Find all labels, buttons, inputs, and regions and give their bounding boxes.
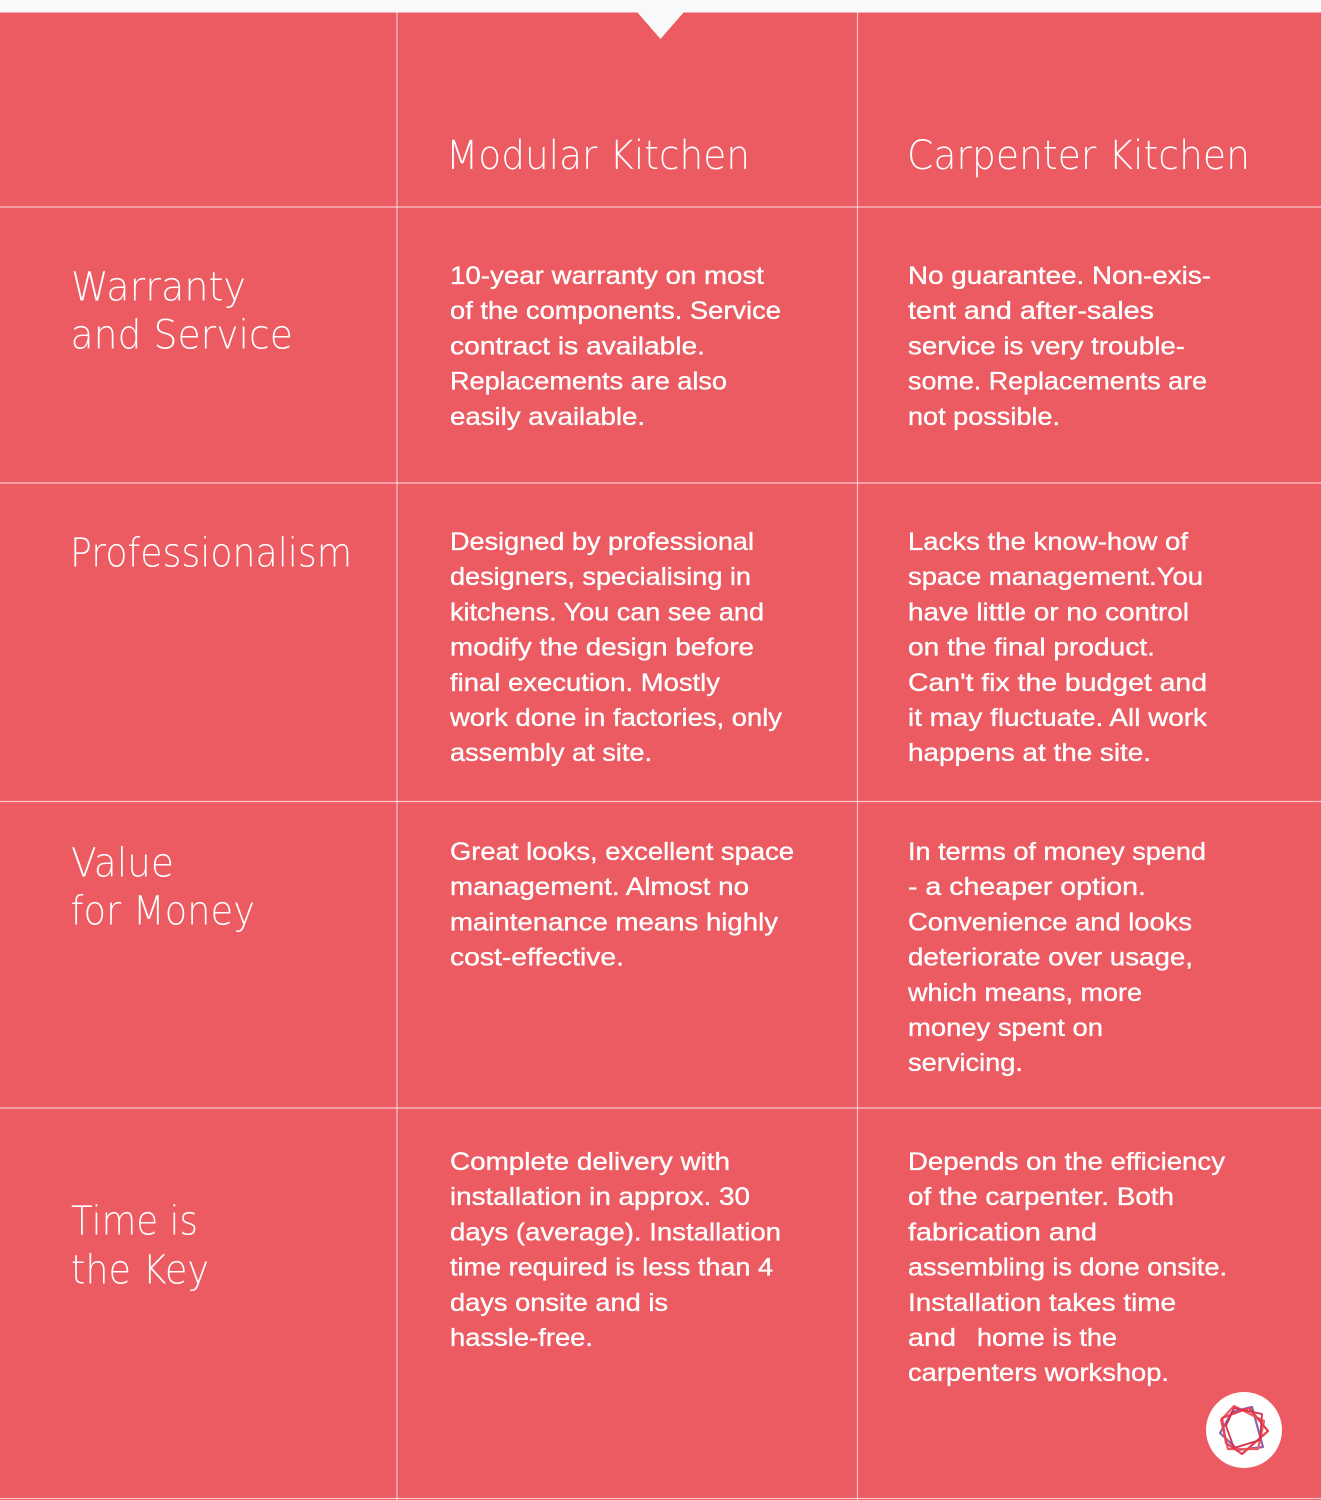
modular text: time: days (average). Installation [450,1218,781,1246]
row label: Value for Money: Value [71,840,174,886]
carpenter text: value: money spent on [908,1014,1103,1042]
modular text: professionalism: final execution. Mostly [450,669,721,697]
carpenter text: professionalism [908,528,1208,767]
carpenter text: time: home is the [977,1324,1117,1352]
row label: Time is the Key: the Key [71,1248,209,1294]
carpenter text: warranty: No guarantee. Non-exis- [908,262,1211,290]
carpenter text: value [907,838,1206,1077]
modular text: value: Great looks, excellent space [450,838,794,866]
modular text: time: installation in approx. 30 [450,1183,750,1211]
modular text: value [450,838,794,972]
modular text: warranty: of the components. Service [450,297,781,325]
carpenter text: value: - a cheaper option. [908,873,1146,901]
carpenter text: value: deteriorate over usage, [908,944,1193,972]
carpenter text: professionalism: Lacks the know-how of [908,528,1188,556]
row label: Time is the Key: Time is [71,1198,198,1244]
heading: Carpenter Kitchen: Carpenter Kitchen [907,133,1250,179]
modular text: warranty: 10-year warranty on most [450,262,764,290]
modular text: value: cost-effective. [450,944,624,972]
row: Warranty and Service [70,262,1211,431]
carpenter text: professionalism: have little or no control [908,598,1189,626]
carpenter text: warranty: tent and after-sales [908,297,1154,325]
modular text: warranty: easily available. [450,403,645,431]
row label: Warranty and Service: and Service [70,312,293,358]
carpenter text: time: Depends on the efficiency [908,1148,1226,1176]
heading: Modular Kitchen: Modular Kitchen [446,133,750,179]
carpenter text: time: carpenters workshop. [908,1359,1169,1387]
carpenter text: warranty: not possible. [908,403,1060,431]
carpenter text: warranty: service is very trouble- [908,332,1185,360]
header row [446,133,1250,179]
carpenter text: professionalism: space management.You [908,563,1203,591]
modular text: time: hassle-free. [450,1324,593,1352]
carpenter text: time [908,1148,1227,1387]
carpenter text: time: fabrication and [908,1218,1097,1246]
modular text: time [450,1148,781,1352]
carpenter text: value: servicing. [908,1049,1023,1077]
modular text: professionalism: assembly at site. [450,739,652,767]
notch pointer [637,12,684,39]
row: Value for Money [70,838,1206,1077]
modular text: professionalism: work done in factories, only [449,704,783,732]
row label: Warranty and Service: Warranty [71,264,246,310]
carpenter text: value: which means, more [907,979,1142,1007]
carpenter text: professionalism: happens at the site. [908,739,1151,767]
carpenter text: time: assembling is done onsite. [908,1254,1227,1282]
carpenter text: time: and [908,1324,956,1352]
carpenter text: professionalism: it may fluctuate. All work [908,704,1208,732]
modular text: value: maintenance means highly [450,908,779,936]
carpenter text: value: Convenience and looks [908,908,1192,936]
logo badge [1206,1392,1282,1468]
modular text: time: days onsite and is [450,1289,668,1317]
carpenter text: professionalism: on the final product. [908,634,1155,662]
modular text: professionalism: designers, specialising in [450,563,751,591]
row label: Professionalism: Professionalism [70,530,352,576]
modular text: warranty: contract is available. [450,332,705,360]
carpenter text: value: In terms of money spend [908,838,1206,866]
modular text: value: management. Almost no [450,873,749,901]
carpenter text: warranty: some. Replacements are [908,368,1207,396]
row: Professionalism [70,528,1208,767]
carpenter text: time: Installation takes time [908,1289,1176,1317]
row label: Time is the Key [71,1198,209,1294]
carpenter text: warranty [908,262,1211,431]
modular text: time: Complete delivery with [450,1148,730,1176]
modular text: warranty: Replacements are also [450,368,727,396]
row label: Warranty and Service [70,264,293,358]
carpenter text: time: of the carpenter. Both [908,1183,1174,1211]
modular text: professionalism [449,528,783,767]
row: Time is the Key [71,1148,1227,1387]
modular text: time: time required is less than 4 [450,1254,773,1282]
modular text: professionalism: kitchens. You can see and [450,598,764,626]
row label: Value for Money: for Money [70,888,255,934]
modular text: professionalism: modify the design before [450,634,754,662]
carpenter text: professionalism: Can't fix the budget and [908,669,1207,697]
modular text: warranty [450,262,781,431]
modular text: professionalism: Designed by professional [450,528,754,556]
row label: Value for Money [70,840,255,934]
